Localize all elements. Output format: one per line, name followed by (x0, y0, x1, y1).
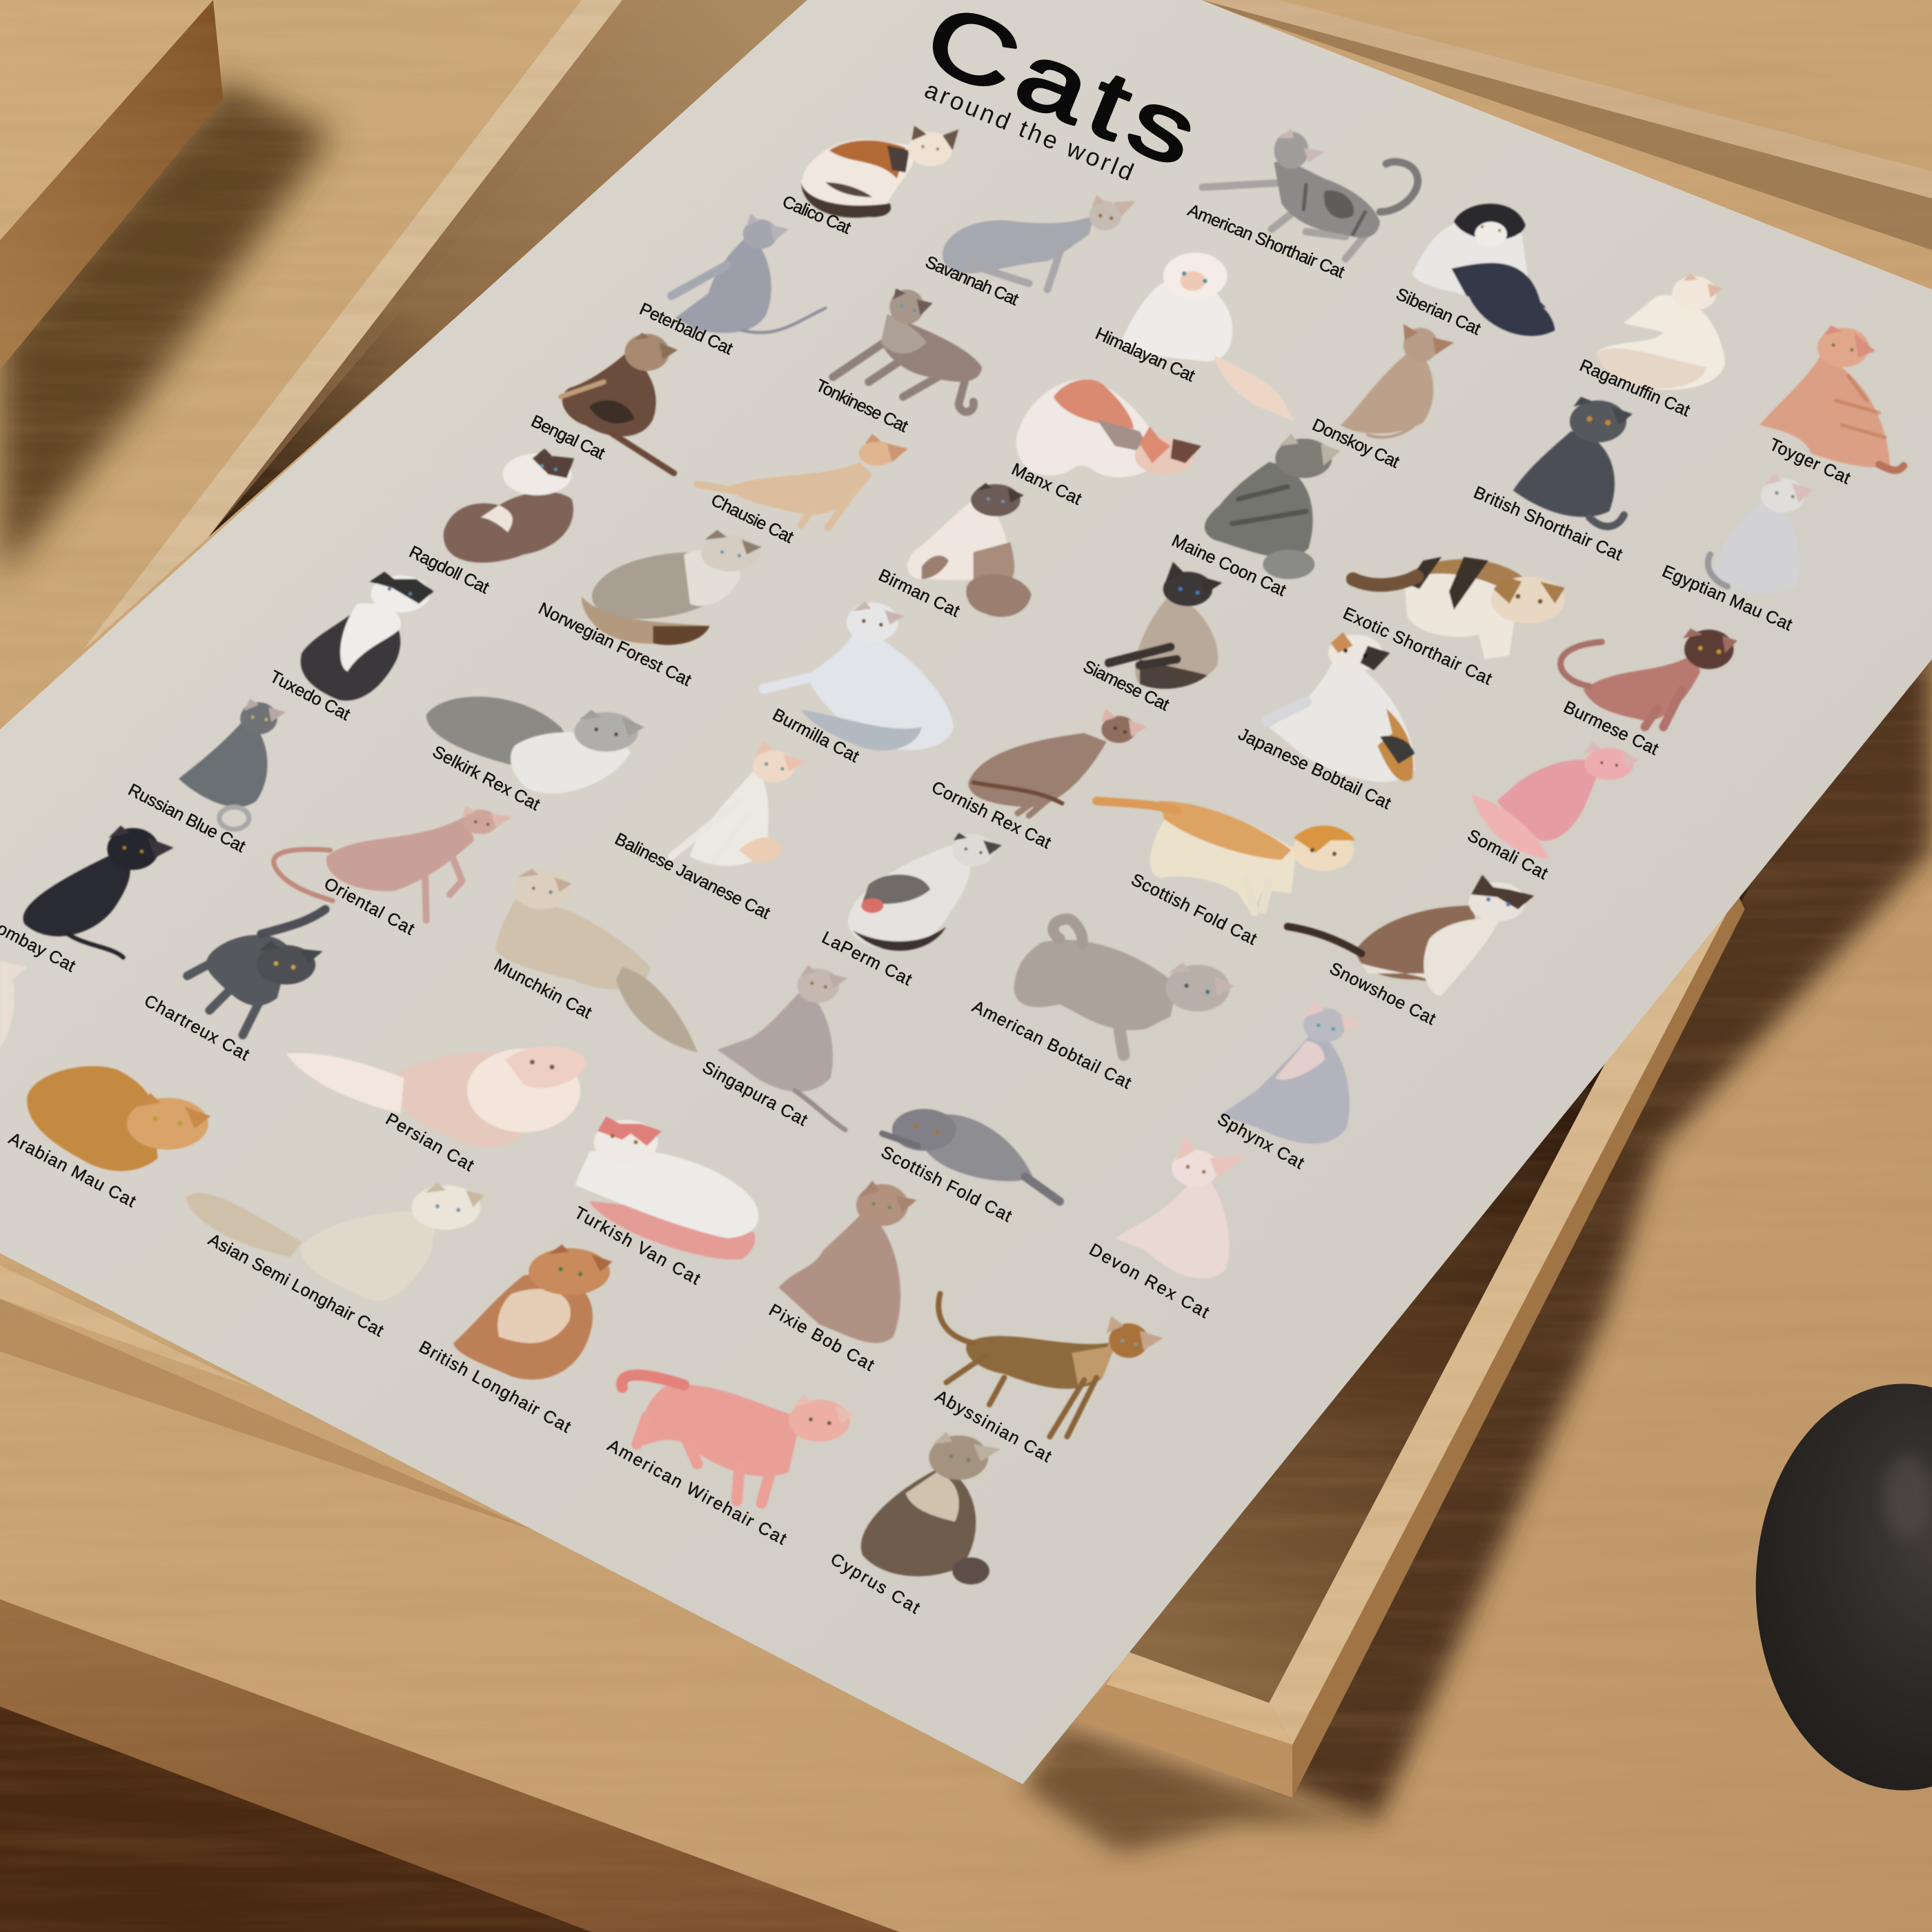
cat: Pixie Bob Cat (766, 1181, 917, 1375)
cat: Somali Cat (1464, 742, 1639, 883)
subtitle: around the world (920, 76, 1138, 186)
cat: Siamese Cat (1080, 562, 1222, 715)
cat: Exotic Shorthair Cat (1340, 557, 1565, 689)
cat: Calico Cat: Calico Cat (780, 192, 854, 238)
cat: Somali Cat: Somali Cat (1464, 826, 1551, 883)
cat: Peterbald Cat: Peterbald Cat (636, 299, 736, 359)
cat: Ragamuffin Cat (1577, 273, 1725, 420)
cat: Siberian Cat (1393, 204, 1555, 339)
cat: Devon Rex Cat (1086, 1136, 1247, 1322)
cat: Bombay Cat (0, 825, 174, 976)
cat: Arabian Mau Cat (6, 1066, 210, 1211)
cat: Maine Coon Cat (1169, 434, 1341, 600)
tray: bottom-right bar (1072, 1651, 1292, 1797)
cat: Oriental Cat: Oriental Cat (321, 874, 417, 939)
cat: British Longhair Cat (415, 1245, 613, 1437)
cat: Sphynx Cat (1214, 999, 1366, 1173)
cat: Donskoy Cat: Donskoy Cat (1309, 415, 1402, 472)
table front edge (0, 1599, 900, 1932)
cat: Siamese Cat: Siamese Cat (1080, 657, 1172, 715)
cat: Egyptian Mau Cat (1659, 475, 1814, 635)
cat: British Shorthair Cat: British Shorthair Cat (1471, 482, 1625, 564)
cat: Scottish Fold Cat (upper) (1096, 801, 1355, 949)
cat: Norwegian Forest Cat: Norwegian Forest Cat (535, 599, 694, 690)
cat: Donskoy Cat (1309, 324, 1454, 472)
cat: Munchkin Cat (491, 869, 698, 1052)
cat: Scottish Fold Cat (upper): Scottish Fold Cat (1128, 870, 1260, 949)
cat: Japanese Bobtail Cat: Japanese Bobtail Cat (1235, 724, 1394, 814)
cat: British Longhair Cat: British Longhair Cat (415, 1337, 574, 1437)
cat: Cyprus Cat: Cyprus Cat (827, 1549, 923, 1618)
cat: Japanese Bobtail Cat (1235, 632, 1414, 814)
cat: Peterbald Cat (636, 213, 825, 359)
cat: Manx Cat: Manx Cat (1009, 460, 1085, 509)
cat: Manx Cat (1009, 379, 1201, 509)
tray: right bar (1269, 894, 1745, 1797)
cat: Savannah Cat (923, 195, 1136, 309)
cat: Burmilla Cat (764, 601, 954, 767)
cat: Arabian Mau Cat: Arabian Mau Cat (6, 1129, 139, 1211)
cat: Toyger Cat (1759, 325, 1904, 488)
cat: Siberian Cat: Siberian Cat (1393, 284, 1483, 339)
cat: Selkirk Rex Cat: Selkirk Rex Cat (429, 742, 543, 814)
cat: Balinese Javanese Cat: Balinese Javanese Cat (612, 829, 773, 923)
cat: Abyssinian Cat (932, 1294, 1163, 1466)
tray: left bar (83, 0, 663, 651)
cat: Chartreux Cat (141, 909, 325, 1065)
cat: Snowshoe Cat: Snowshoe Cat (1326, 958, 1439, 1029)
cat: Asian Semi Longhair Cat: Asian Semi Longhair Cat (205, 1230, 387, 1341)
cat: Russian Blue Cat: Russian Blue Cat (125, 780, 248, 856)
cat: Egyptian Mau Cat: Egyptian Mau Cat (1659, 562, 1795, 635)
cat: Bengal Cat: Bengal Cat (528, 411, 608, 464)
cat: Burmese Cat: Burmese Cat (1561, 698, 1662, 759)
cat: Scottish Fold Cat (lower): Scottish Fold Cat (878, 1142, 1015, 1226)
cat: Exotic Shorthair Cat: Exotic Shorthair Cat (1340, 604, 1495, 689)
cat: American Bobtail Cat (969, 919, 1234, 1093)
cat: Himalayan Cat: Himalayan Cat (1092, 324, 1198, 386)
cat: Scottish Fold Cat (lower) (878, 1109, 1060, 1226)
cat: American Bobtail Cat: American Bobtail Cat (969, 997, 1134, 1093)
cat: Persian Cat: Persian Cat (382, 1110, 477, 1175)
cat: American Shorthair Cat: American Shorthair Cat (1185, 200, 1348, 282)
cat: LaPerm Cat (819, 833, 1002, 989)
cat: Oriental Cat (274, 806, 513, 939)
cat: Tonkinese Cat (813, 288, 982, 436)
cat: Snowshoe Cat (1288, 875, 1534, 1029)
cat: Munchkin Cat: Munchkin Cat (491, 955, 595, 1023)
cat: Tuxedo Cat: Tuxedo Cat (267, 667, 353, 724)
cat: American Wirehair Cat: American Wirehair Cat (604, 1436, 790, 1549)
cat: cropped cat at left edge (0, 961, 27, 1047)
black stone sphere (1756, 1383, 1932, 1791)
cat: Birman Cat: Birman Cat (876, 565, 963, 621)
cat: Pixie Bob Cat: Pixie Bob Cat (766, 1300, 878, 1375)
cat: Cornish Rex Cat: Cornish Rex Cat (929, 778, 1054, 853)
cat: Ragdoll Cat: Ragdoll Cat (406, 542, 492, 598)
cat: Bengal Cat (528, 333, 678, 473)
cat: Chausie Cat (698, 434, 908, 547)
tray: top-right bar (1203, 0, 1932, 250)
cat: Calico Cat (780, 126, 958, 238)
cat: Abyssinian Cat: Abyssinian Cat (932, 1386, 1055, 1466)
cat: Russian Blue Cat (125, 698, 286, 856)
cat: Chausie Cat: Chausie Cat (708, 491, 796, 547)
cat: Tonkinese Cat: Tonkinese Cat (813, 375, 911, 436)
tray: bottom-left bar (0, 1265, 538, 1532)
cat: Burmilla Cat: Burmilla Cat (769, 705, 862, 767)
cat: Selkirk Rex Cat (426, 697, 644, 814)
cat: Turkish Van Cat: Turkish Van Cat (571, 1203, 704, 1289)
cat: Himalayan Cat (1092, 253, 1294, 422)
cat: Chartreux Cat: Chartreux Cat (141, 991, 253, 1065)
cat: Persian Cat (286, 1046, 588, 1175)
cat: Cyprus Cat (827, 1432, 1000, 1618)
cat: Birman Cat (876, 483, 1032, 621)
cat: LaPerm Cat: LaPerm Cat (819, 928, 915, 989)
cat: Asian Semi Longhair Cat (186, 1183, 484, 1341)
cat: Maine Coon Cat: Maine Coon Cat (1169, 531, 1289, 600)
cat: Toyger Cat: Toyger Cat (1766, 435, 1853, 488)
cat: Balinese Javanese Cat (612, 740, 806, 923)
cat: American Shorthair Cat (1185, 128, 1418, 282)
cat: Ragamuffin Cat: Ragamuffin Cat (1577, 356, 1693, 420)
top-left wooden box (0, 0, 223, 370)
cat: Sphynx Cat: Sphynx Cat (1214, 1110, 1308, 1173)
cat: British Shorthair Cat (1471, 397, 1633, 564)
cat: Cornish Rex Cat (929, 709, 1147, 853)
cat: Singapura Cat: Singapura Cat (699, 1057, 811, 1130)
cat: Norwegian Forest Cat (535, 530, 762, 690)
cat: Ragdoll Cat (406, 448, 574, 598)
cat: Burmese Cat (1561, 629, 1737, 759)
cat: Savannah Cat: Savannah Cat (923, 253, 1021, 309)
cat: American Wirehair Cat (604, 1375, 854, 1549)
cat: Tuxedo Cat (267, 572, 434, 724)
cat: Singapura Cat (699, 965, 848, 1130)
cat: Devon Rex Cat: Devon Rex Cat (1086, 1240, 1212, 1322)
cat: Turkish Van Cat (571, 1116, 758, 1289)
